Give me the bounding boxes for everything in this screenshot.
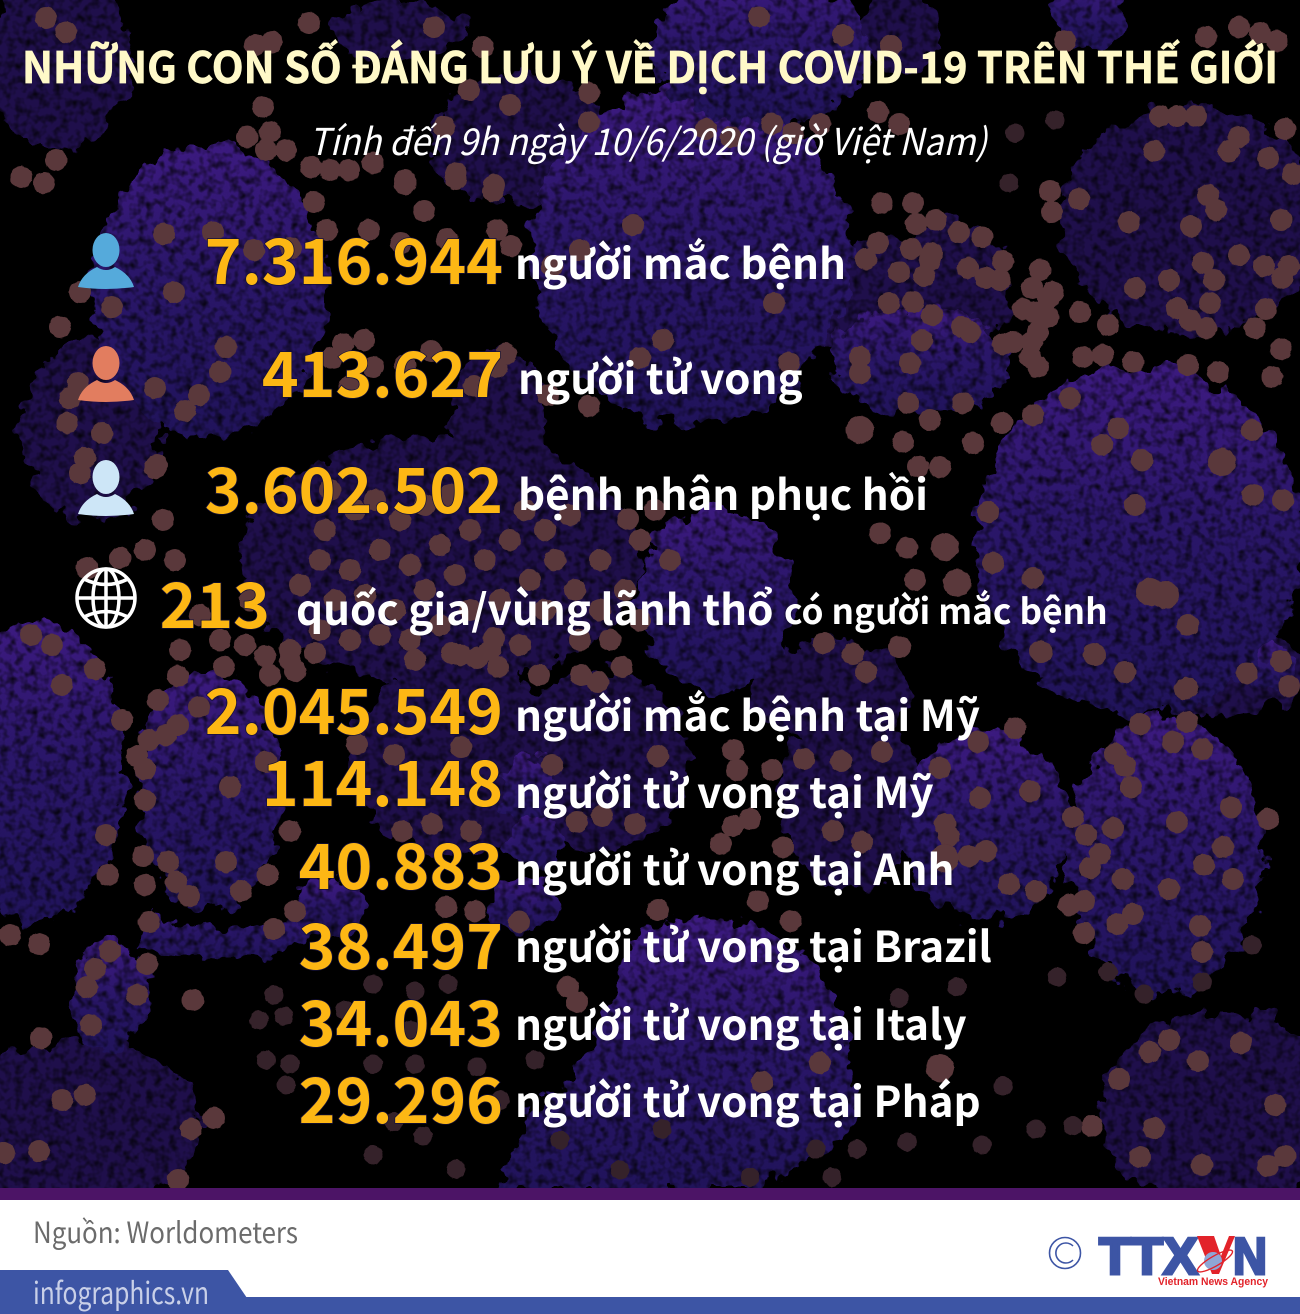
- stat: countries: 213: [160, 556, 270, 646]
- stat: UK deaths: người tử vong tại Anh: [515, 837, 955, 898]
- stat: cases: 7.316.944: [205, 212, 503, 302]
- stat: Brazil deaths: người tử vong tại Brazil: [515, 914, 992, 975]
- icon: person light blue: [78, 460, 134, 516]
- stat: UK deaths: [299, 817, 955, 907]
- footer: [0, 1188, 1300, 1314]
- stat: US deaths: 114.148: [262, 734, 503, 824]
- stat: France deaths: [299, 1051, 981, 1141]
- stat: Italy deaths: 34.043: [299, 974, 503, 1064]
- stat: deaths: 413.627: [262, 325, 503, 415]
- stat: Brazil deaths: [299, 897, 992, 987]
- stat: recovered: [205, 441, 928, 531]
- stat: recovered: 3.602.502: [205, 441, 503, 531]
- stat: countries: quốc gia/vùng lãnh thổ: [296, 577, 774, 638]
- stat: deaths: [262, 325, 803, 415]
- stat: US cases: người mắc bệnh tại Mỹ: [515, 683, 980, 744]
- logo: TTXVN: N: [1233, 1228, 1267, 1286]
- icon: globe: [77, 569, 135, 627]
- logo: TTXVN: [1099, 1228, 1269, 1288]
- stat: Italy deaths: người tử vong tại Italy: [515, 992, 967, 1053]
- stat: countries: có người mắc bệnh: [784, 584, 1108, 635]
- stat: cases: [205, 212, 846, 302]
- stat: Italy deaths: [299, 974, 967, 1064]
- stat: US deaths: [262, 734, 934, 824]
- logo: TTXVN: Vietnam News Agency: [1158, 1276, 1269, 1288]
- stat: France deaths: 29.296: [299, 1051, 503, 1141]
- stat: US cases: 2.045.549: [205, 662, 503, 752]
- copyright symbol: [1050, 1238, 1080, 1268]
- stat: UK deaths: 40.883: [299, 817, 503, 907]
- subtitle: Tính đến 9h ngày 10/6/2020 (giờ Việt Nam): [309, 112, 988, 166]
- source: Nguồn: Worldometers: [33, 1210, 298, 1252]
- icon: person blue: [78, 233, 134, 289]
- stat: cases: người mắc bệnh: [515, 231, 846, 292]
- website: infographics.vn: [33, 1269, 209, 1313]
- title: NHỮNG CON SỐ ĐÁNG LƯU Ý VỀ DỊCH COVID-19 TRÊN THẾ GIỚI: [22, 34, 1278, 96]
- stat: Brazil deaths: 38.497: [299, 897, 503, 987]
- stat: recovered: bệnh nhân phục hồi: [518, 462, 928, 523]
- stat: US deaths: người tử vong tại Mỹ: [515, 760, 934, 821]
- stat: US cases: [205, 662, 980, 752]
- icon: person orange: [78, 346, 134, 402]
- logo: TTXVN: TTX: [1099, 1228, 1198, 1286]
- stat: countries: [160, 556, 1108, 646]
- stat: France deaths: người tử vong tại Pháp: [515, 1069, 981, 1130]
- stat: deaths: người tử vong: [518, 346, 803, 407]
